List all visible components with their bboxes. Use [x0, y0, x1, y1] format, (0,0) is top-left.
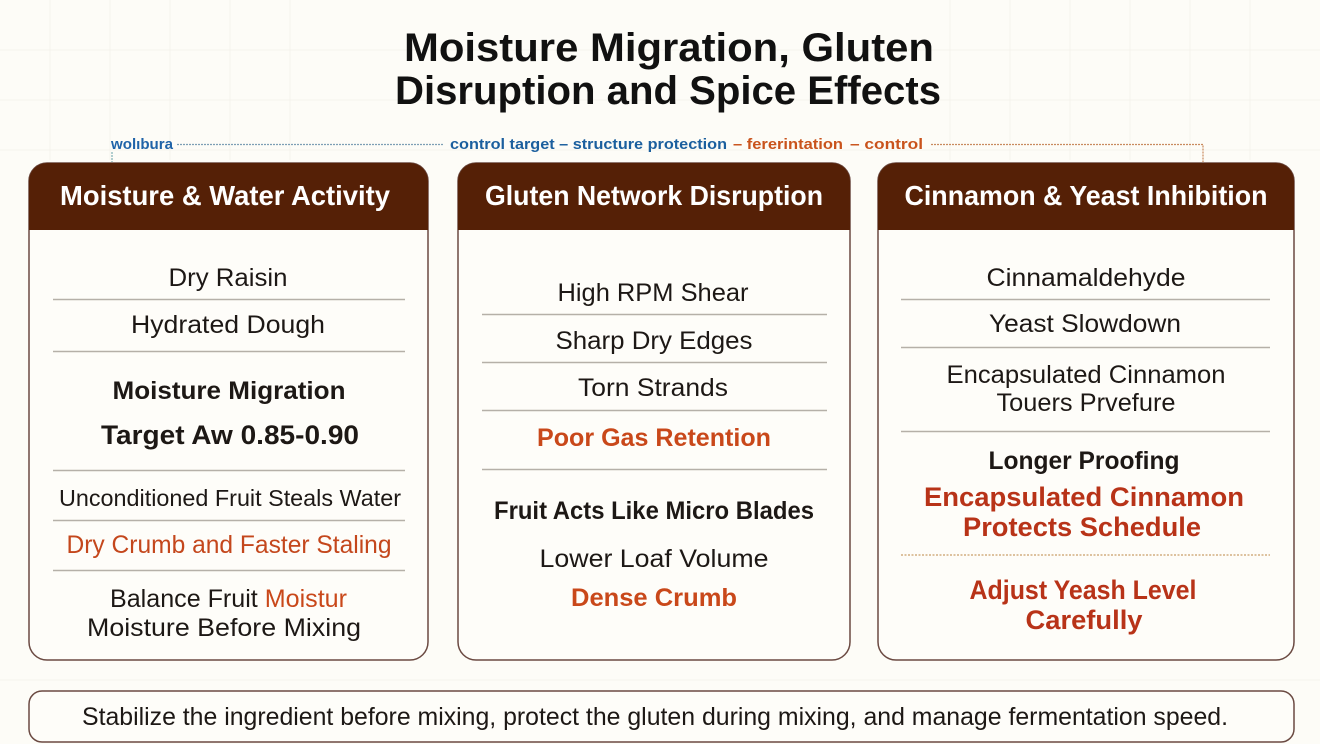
cinnamon list: Protects Schedule — [963, 512, 1201, 542]
cinnamon list: Adjust Yeash Level — [970, 575, 1196, 605]
cinnamon list: Touers Prvefure — [996, 389, 1176, 417]
gluten list: Poor Gas Retention — [537, 424, 771, 452]
cinnamon list: Cinnamaldehyde — [986, 264, 1186, 292]
gluten list: Dense Crumb — [571, 584, 737, 612]
moisture list: Unconditioned Fruit Steals Water — [59, 485, 401, 511]
gluten list: Torn Strands — [578, 374, 728, 402]
panel: gluten network disruption — [458, 163, 850, 660]
legend strip: control target connector: wolıbura — [110, 136, 174, 153]
panel header: cinnamon — [878, 163, 1294, 230]
moisture list: Dry Crumb and Faster Staling — [66, 531, 392, 559]
cinnamon list: Carefully — [1026, 605, 1142, 635]
title: Moisture Migration, Gluten — [404, 26, 934, 70]
gluten list: Lower Loaf Volume — [540, 545, 768, 573]
panel header: cinnamon: Cinnamon & Yeast Inhibition — [904, 180, 1268, 211]
panel header: gluten: Gluten Network Disruption — [485, 180, 823, 211]
panel header: gluten — [458, 163, 850, 230]
cinnamon list: Longer Proofing — [988, 447, 1180, 475]
legend strip: control target connector: control target – structure protection — [450, 136, 727, 153]
summary banner: Stabilize the ingredient before mixing, protect the gluten during mixing, and manage fermentation speed. — [82, 703, 1228, 731]
cinnamon list: Yeast Slowdown — [989, 310, 1181, 338]
moisture list: Moisture Before Mixing — [87, 614, 361, 642]
title — [395, 26, 941, 113]
cinnamon list — [901, 264, 1270, 635]
gluten list — [482, 279, 827, 612]
panel header: moisture — [29, 163, 428, 230]
moisture list: Balance Fruit Moistur — [110, 585, 347, 613]
summary banner — [29, 691, 1294, 742]
panel header: moisture: Moisture & Water Activity — [60, 180, 390, 211]
panel: cinnamon and yeast inhibition — [878, 163, 1294, 660]
gluten list: High RPM Shear — [558, 279, 748, 307]
moisture list: Dry Raisin — [168, 264, 288, 292]
cinnamon list: Encapsulated Cinnamon — [924, 482, 1244, 512]
legend strip: control target connector: – control — [850, 136, 923, 153]
moisture list: Target Aw 0.85-0.90 — [101, 420, 359, 450]
legend strip: control target connector: – fererintation — [733, 136, 843, 153]
moisture list — [53, 264, 405, 642]
legend strip: control target connector — [110, 136, 1203, 162]
title: Disruption and Spice Effects — [395, 69, 941, 113]
gluten list: Sharp Dry Edges — [556, 327, 752, 355]
panel: moisture and water activity — [29, 163, 428, 660]
cinnamon list: Encapsulated Cinnamon — [946, 361, 1226, 389]
moisture list: Hydrated Dough — [131, 311, 325, 339]
gluten list: Fruit Acts Like Micro Blades — [494, 497, 814, 525]
moisture list: Moisture Migration — [112, 377, 346, 405]
